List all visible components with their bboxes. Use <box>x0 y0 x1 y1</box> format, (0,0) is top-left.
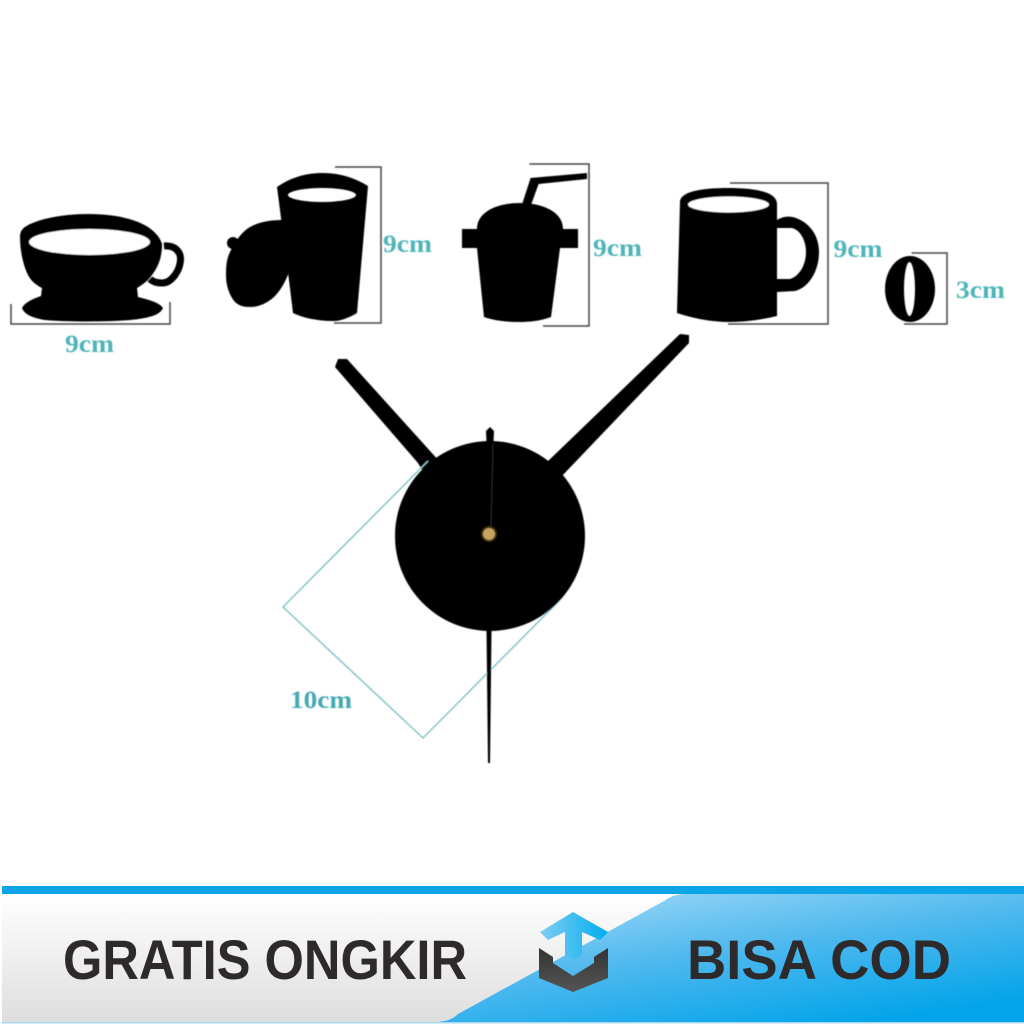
logo arrow <box>540 912 608 960</box>
text: bisa cod: BISA COD <box>687 928 951 991</box>
logo <box>539 912 608 992</box>
panel: clock movement, 10cm <box>283 334 689 763</box>
dimension bracket <box>334 167 381 323</box>
panel: numeral zero, 3cm <box>885 253 1005 324</box>
panel: glass with lid, 9cm <box>226 167 432 323</box>
icon: teacup <box>20 214 181 322</box>
label: 3cm: 3cm <box>956 277 1005 304</box>
clock hand: right <box>545 334 689 478</box>
icon: mug <box>677 188 819 322</box>
label: 9cm: 9cm <box>593 235 642 262</box>
clock disc <box>395 441 585 631</box>
text: gratis ongkir: GRATIS ONGKIR <box>63 928 467 991</box>
second hand <box>486 427 494 763</box>
dimension bracket <box>530 164 589 326</box>
label: 9cm: 9cm <box>834 236 883 263</box>
dimension bracket <box>904 253 947 324</box>
dimension bracket <box>728 183 828 324</box>
panel: takeaway cup with straw, 9cm <box>462 164 642 326</box>
dimension rectangle <box>283 461 560 738</box>
banner background <box>2 894 1024 1022</box>
centre hub <box>481 526 497 542</box>
label: 9cm: 9cm <box>383 231 432 258</box>
dimension bracket <box>11 302 170 324</box>
icon: lid <box>226 220 289 307</box>
faint highlight on second hand <box>491 444 493 526</box>
banner <box>2 886 1024 1024</box>
panel: mug, 9cm <box>677 183 883 324</box>
clock hand: left <box>335 359 440 475</box>
panel: teacup with saucer, 9cm <box>11 214 181 358</box>
banner top strip <box>2 886 1024 894</box>
banner bottom line <box>2 1022 1024 1024</box>
icon: glass <box>277 173 368 321</box>
banner blue diagonal <box>438 894 1024 1022</box>
logo tray <box>539 948 608 992</box>
icon: zero numeral <box>885 256 935 322</box>
label: 9cm: 9cm <box>65 331 114 358</box>
label: 10cm: 10cm <box>290 687 352 714</box>
icon: straw cup <box>462 173 587 322</box>
